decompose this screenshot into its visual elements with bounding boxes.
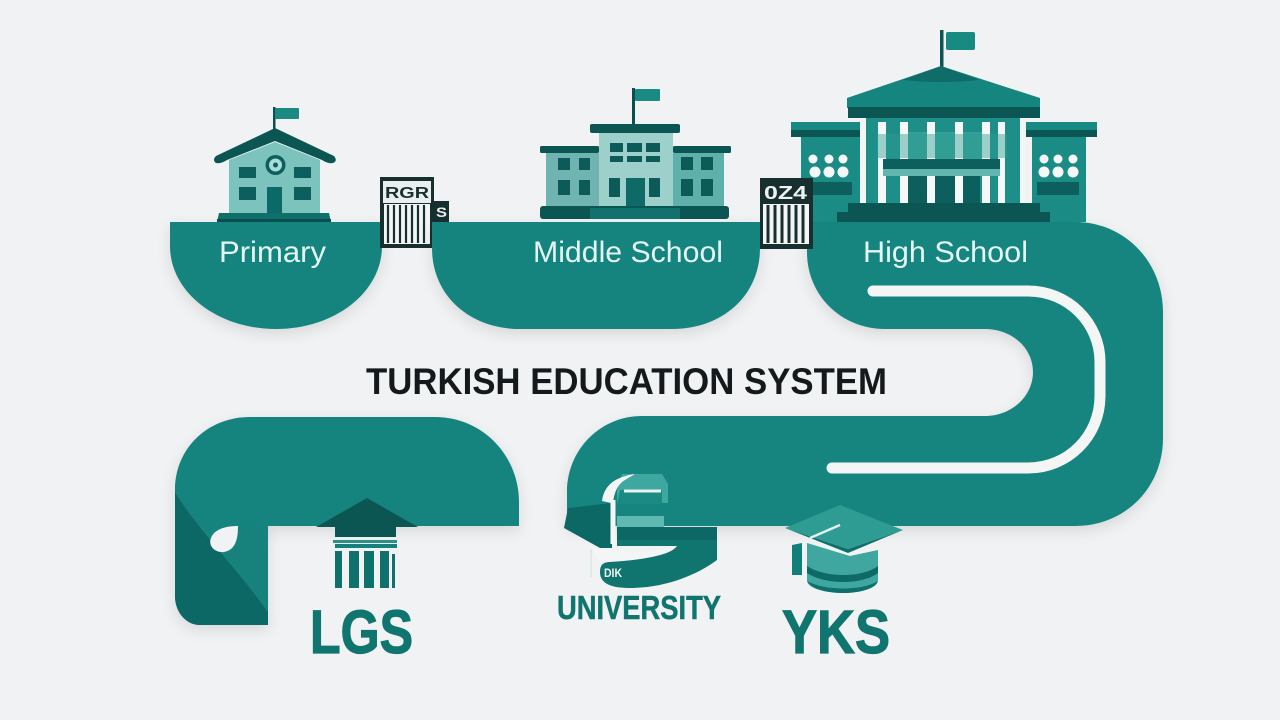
- icon: graduation cap: [785, 505, 903, 593]
- icon: gate two: 0Z4: [764, 183, 807, 203]
- ribbon fold: [175, 492, 268, 625]
- icon: high school building: [791, 30, 1097, 222]
- LGS label: LGS: [310, 598, 413, 666]
- white route line: [832, 291, 1100, 468]
- YKS label: YKS: [782, 598, 890, 666]
- ribbon notch: [210, 526, 238, 552]
- icon: university book: [564, 474, 717, 588]
- ribbon lobe: [226, 526, 268, 612]
- icon: gate one: RGR: [385, 185, 430, 202]
- panel: primary stage: [170, 222, 382, 329]
- icon: gate one: S: [436, 204, 447, 220]
- primary bowl: [170, 222, 382, 329]
- icon: gate one: [380, 177, 449, 248]
- panel: high school pathway: [567, 222, 1163, 526]
- panel: LGS ribbon: [175, 417, 519, 625]
- primary label: Primary: [219, 236, 326, 269]
- ribbon body: [175, 417, 519, 625]
- icon: primary school house: [214, 107, 336, 222]
- middle school label: Middle School: [533, 236, 723, 269]
- title: TURKISH EDUCATION SYSTEM: [366, 361, 887, 402]
- winding road: [567, 222, 1163, 526]
- icon: university book: DIK: [604, 566, 622, 580]
- panel: middle school stage: [432, 222, 760, 329]
- middle school band: [432, 222, 760, 329]
- university label: UNIVERSITY: [557, 589, 721, 626]
- icon: middle school building: [540, 88, 731, 219]
- icon: LGS institution: [316, 498, 418, 588]
- high school label: High School: [863, 236, 1028, 269]
- icon: gate two: [760, 178, 813, 249]
